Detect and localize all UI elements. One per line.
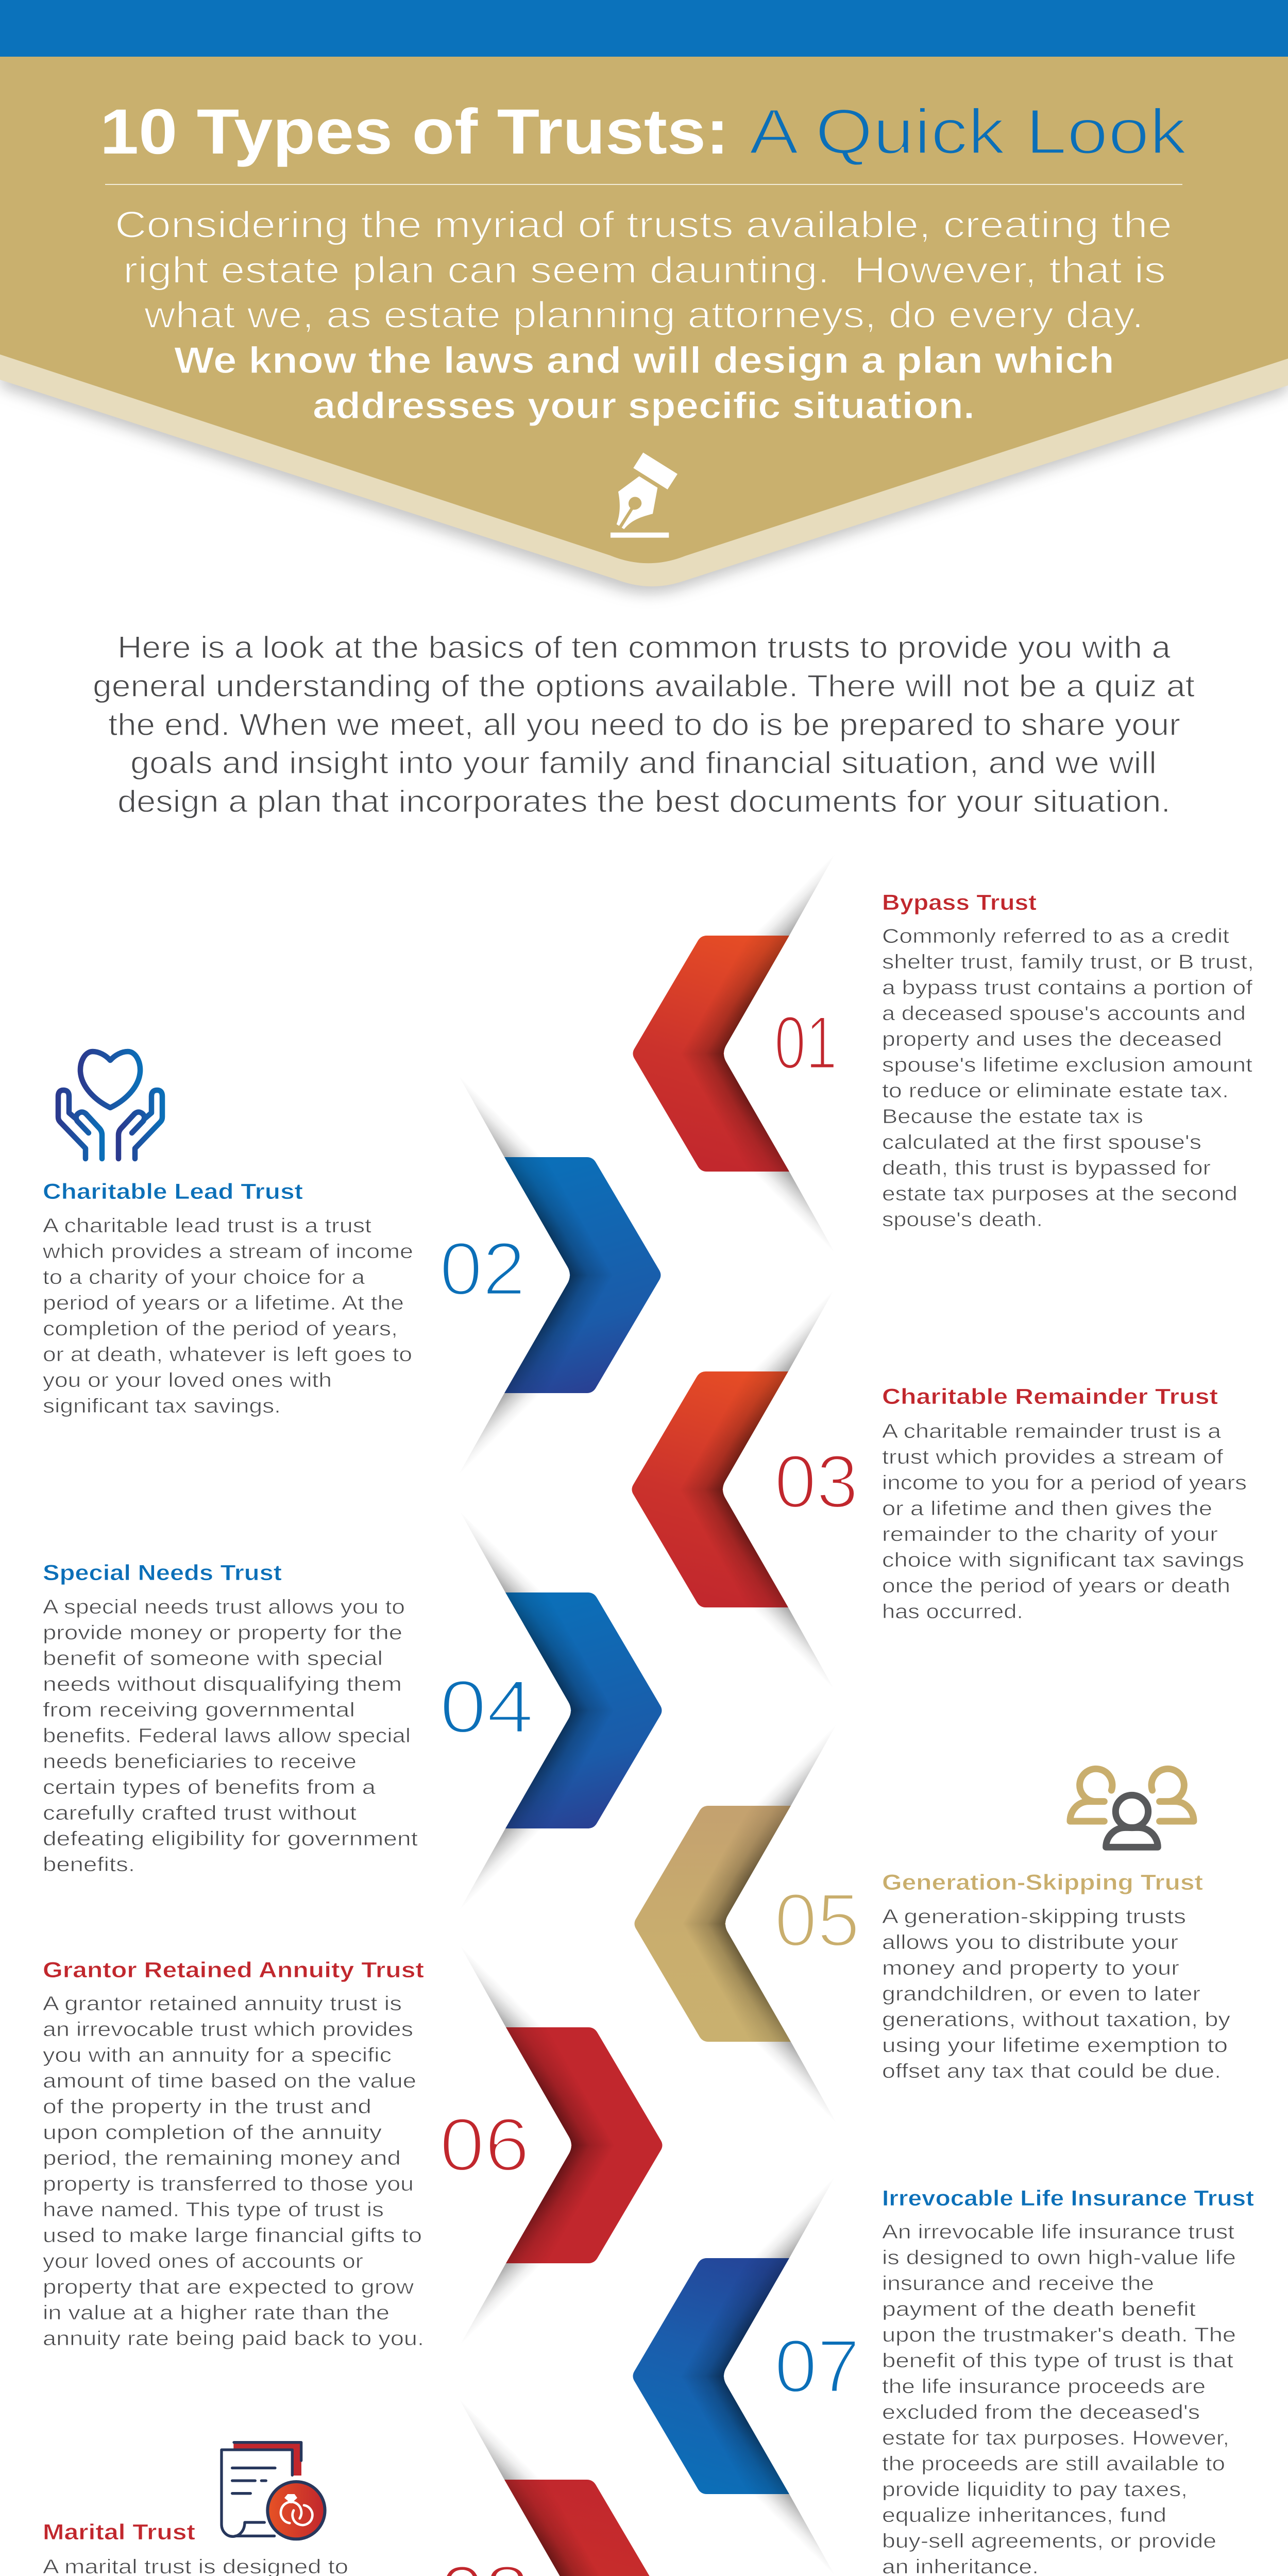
intro text: Considering the myriad of trusts available, creating the [115, 205, 1172, 246]
body: Irrevocable Life Insurance Trust: An irrevocable life insurance trust [882, 2221, 1234, 2243]
heading: Special Needs Trust: Special Needs Trust [43, 1561, 282, 1585]
icon: fountain pen [611, 452, 677, 538]
panel: Special Needs Trust [43, 1561, 418, 1876]
body: Generation-Skipping Trust: allows you to distribute your [882, 1931, 1178, 1954]
body: Grantor Retained Annuity Trust: of the property in the trust and [43, 2096, 371, 2118]
title [100, 96, 1187, 167]
body: Special Needs Trust: benefit of someone with special [43, 1648, 383, 1670]
body: Special Needs Trust: from receiving governmental [43, 1699, 355, 1721]
body: Irrevocable Life Insurance Trust: buy-sell agreements, or provide [882, 2530, 1216, 2552]
body: Grantor Retained Annuity Trust: used to make large financial gifts to [43, 2225, 422, 2247]
body: Irrevocable Life Insurance Trust: payment of the death benefit [882, 2298, 1196, 2320]
intro text [115, 205, 1172, 427]
body: Generation-Skipping Trust: offset any tax that could be due. [882, 2060, 1221, 2082]
intro paragraph: design a plan that incorporates the best documents for your situation. [117, 784, 1171, 819]
number 02: 02 [439, 1227, 526, 1311]
body: Charitable Lead Trust: to a charity of your choice for a [43, 1266, 365, 1289]
title: 10 Types of Trusts: [100, 96, 729, 167]
body: Bypass Trust [882, 925, 1254, 1231]
body: Grantor Retained Annuity Trust: upon completion of the annuity [43, 2122, 382, 2144]
body: Charitable Remainder Trust: or a lifetime and then gives the [882, 1498, 1212, 1520]
body: Grantor Retained Annuity Trust: an irrevocable trust which provides [43, 2019, 413, 2041]
body: Charitable Remainder Trust: income to you for a period of years [882, 1472, 1247, 1494]
intro text: We know the laws and will design a plan which [174, 340, 1114, 381]
body: Charitable Lead Trust: significant tax savings. [43, 1395, 281, 1417]
title: A Quick Look [749, 96, 1187, 167]
intro paragraph: Here is a look at the basics of ten common trusts to provide you with a [117, 630, 1171, 665]
heading: Grantor Retained Annuity Trust: Grantor Retained Annuity Trust [43, 1958, 424, 1982]
body: Irrevocable Life Insurance Trust: provide liquidity to pay taxes, [882, 2479, 1188, 2501]
body: Generation-Skipping Trust: grandchildren, or even to later [882, 1983, 1200, 2005]
body: Charitable Remainder Trust: once the period of years or death [882, 1575, 1230, 1597]
body: Grantor Retained Annuity Trust: your loved ones of accounts or [43, 2250, 363, 2273]
body: Special Needs Trust: benefits. Federal laws allow special [43, 1725, 411, 1747]
body: Grantor Retained Annuity Trust: annuity rate being paid back to you. [43, 2328, 424, 2350]
body: Bypass Trust: Because the estate tax is [882, 1106, 1143, 1128]
banner light edge [0, 350, 1288, 586]
panel: Generation-Skipping Trust [882, 1870, 1231, 2082]
body: Generation-Skipping Trust: A generation-skipping trusts [882, 1906, 1186, 1928]
body: Bypass Trust: a deceased spouse's accounts and [882, 1003, 1246, 1025]
body: Charitable Lead Trust: or at death, whatever is left goes to [43, 1344, 412, 1366]
body: Irrevocable Life Insurance Trust: the proceeds are still available to [882, 2453, 1225, 2475]
body: Grantor Retained Annuity Trust: you with an annuity for a specific [43, 2044, 392, 2066]
body: Charitable Remainder Trust: has occurred. [882, 1601, 1023, 1623]
top blue bar [0, 0, 1288, 57]
body: Grantor Retained Annuity Trust: in value at a higher rate than the [43, 2302, 389, 2324]
chevron 03 [632, 1291, 834, 1688]
body: Bypass Trust: to reduce or eliminate estate tax. [882, 1080, 1229, 1102]
body: Generation-Skipping Trust: using your lifetime exemption to [882, 2035, 1228, 2057]
body: Grantor Retained Annuity Trust: amount of time based on the value [43, 2070, 416, 2092]
icon: three people [1070, 1769, 1194, 1847]
panel: Irrevocable Life Insurance Trust [882, 2186, 1254, 2576]
body: Bypass Trust: spouse's lifetime exclusion amount [882, 1054, 1252, 1076]
chevron 01 [633, 855, 835, 1252]
body: Irrevocable Life Insurance Trust: benefit of this type of trust is that [882, 2350, 1233, 2372]
panel: gold header banner [0, 57, 1288, 594]
body: Charitable Lead Trust [42, 1215, 413, 1417]
intro text: addresses your specific situation. [313, 385, 975, 427]
body: Charitable Lead Trust: which provides a stream of income [42, 1241, 413, 1263]
chevron 07 [633, 2177, 835, 2575]
banner drop shadow [0, 371, 1288, 594]
body: Charitable Lead Trust: you or your loved ones with [43, 1369, 332, 1392]
body: Bypass Trust: property and uses the deceased [882, 1028, 1222, 1050]
body: Irrevocable Life Insurance Trust: estate for tax purposes. However, [882, 2427, 1229, 2449]
number 05: 05 [774, 1878, 860, 1962]
body: Charitable Remainder Trust [882, 1420, 1247, 1623]
panel: Grantor Retained Annuity Trust [43, 1958, 424, 2350]
number 01: 01 [774, 1001, 837, 1084]
body: Grantor Retained Annuity Trust: property is transferred to those you [43, 2173, 414, 2195]
panel: Marital Trust [43, 2520, 420, 2576]
chevron 02 [459, 1076, 660, 1474]
body: Irrevocable Life Insurance Trust [882, 2221, 1236, 2576]
body: Generation-Skipping Trust [882, 1906, 1231, 2082]
chevron 08 [459, 2399, 660, 2576]
panel: Charitable Remainder Trust [882, 1384, 1247, 1623]
body: Generation-Skipping Trust: generations, without taxation, by [882, 2009, 1231, 2031]
banner gold body [0, 57, 1288, 563]
body: Irrevocable Life Insurance Trust: equalize inheritances, fund [882, 2504, 1166, 2527]
body: Irrevocable Life Insurance Trust: the life insurance proceeds are [882, 2376, 1206, 2398]
number 03: 03 [774, 1439, 858, 1523]
icon: document with wedding rings [222, 2443, 325, 2539]
body: Irrevocable Life Insurance Trust: insurance and receive the [882, 2273, 1154, 2295]
body: Special Needs Trust: carefully crafted trust without [43, 1802, 357, 1824]
panel: Charitable Lead Trust [42, 1179, 413, 1417]
body: Bypass Trust: a bypass trust contains a portion of [882, 977, 1252, 999]
body: Charitable Remainder Trust: remainder to the charity of your [882, 1523, 1218, 1546]
body: Special Needs Trust: defeating eligibility for government [43, 1828, 418, 1850]
body: Generation-Skipping Trust: money and property to your [882, 1957, 1179, 1979]
body: Charitable Lead Trust: period of years or a lifetime. At the [43, 1292, 404, 1314]
heading: Charitable Remainder Trust: Charitable Remainder Trust [882, 1384, 1218, 1409]
heading: Irrevocable Life Insurance Trust: Irrevocable Life Insurance Trust [882, 2186, 1254, 2211]
body: Irrevocable Life Insurance Trust: is designed to own high-value life [882, 2247, 1236, 2269]
body: Special Needs Trust: needs without disqualifying them [43, 1673, 402, 1696]
body: Grantor Retained Annuity Trust: property that are expected to grow [43, 2276, 414, 2298]
heading: Charitable Lead Trust: Charitable Lead Trust [43, 1179, 303, 1204]
body: Charitable Lead Trust: A charitable lead trust is a trust [43, 1215, 371, 1237]
body: Charitable Remainder Trust: choice with significant tax savings [882, 1549, 1244, 1571]
intro text: what we, as estate planning attorneys, do every day. [144, 295, 1144, 336]
body: Special Needs Trust: needs beneficiaries to receive [43, 1751, 357, 1773]
number 04: 04 [439, 1665, 534, 1749]
body: Bypass Trust: shelter trust, family trust, or B trust, [882, 951, 1254, 973]
body: Charitable Remainder Trust: A charitable remainder trust is a [882, 1420, 1221, 1443]
body: Grantor Retained Annuity Trust: period, the remaining money and [43, 2147, 401, 2170]
intro paragraph: goals and insight into your family and financial situation, and we will [130, 745, 1157, 780]
chevron 05 [635, 1725, 836, 2123]
chevron 04 [460, 1512, 662, 1909]
body: Special Needs Trust: A special needs trust allows you to [43, 1596, 405, 1618]
heading: Generation-Skipping Trust: Generation-Skipping Trust [882, 1870, 1203, 1895]
body: Bypass Trust: calculated at the first spouse's [882, 1131, 1201, 1154]
intro paragraph: general understanding of the options available. There will not be a quiz at [93, 669, 1195, 703]
number 07: 07 [774, 2324, 860, 2408]
body: Irrevocable Life Insurance Trust: excluded from the deceased's [882, 2401, 1200, 2424]
body: Special Needs Trust: certain types of benefits from a [43, 1776, 376, 1799]
body: Bypass Trust: spouse's death. [882, 1209, 1043, 1231]
body: Bypass Trust: estate tax purposes at the second [882, 1183, 1238, 1205]
number 06: 06 [439, 2103, 530, 2187]
intro paragraph: the end. When we meet, all you need to do is be prepared to share your [108, 707, 1180, 742]
body: Charitable Remainder Trust: trust which provides a stream of [882, 1446, 1223, 1468]
heading: Marital Trust: Marital Trust [43, 2520, 195, 2545]
intro text: right estate plan can seem daunting. However, that is [123, 250, 1166, 291]
body: Special Needs Trust: benefits. [43, 1854, 135, 1876]
body: Charitable Lead Trust: completion of the period of years, [43, 1318, 398, 1340]
body: Special Needs Trust: provide money or property for the [43, 1622, 402, 1644]
panel: Bypass Trust [882, 890, 1254, 1231]
body: Grantor Retained Annuity Trust: have named. This type of trust is [43, 2199, 384, 2221]
body: Special Needs Trust [43, 1596, 418, 1876]
heading: Bypass Trust: Bypass Trust [882, 890, 1037, 915]
body: Bypass Trust: death, this trust is bypassed for [882, 1157, 1211, 1179]
body: Grantor Retained Annuity Trust: A grantor retained annuity trust is [43, 1993, 402, 2015]
body: Irrevocable Life Insurance Trust: upon the trustmaker's death. The [882, 2324, 1236, 2346]
intro paragraph [93, 630, 1195, 819]
chevron 06 [461, 1946, 663, 2344]
icon: hands holding heart [58, 1052, 162, 1159]
body: Grantor Retained Annuity Trust [43, 1993, 424, 2350]
body: Bypass Trust: Commonly referred to as a credit [882, 925, 1229, 947]
